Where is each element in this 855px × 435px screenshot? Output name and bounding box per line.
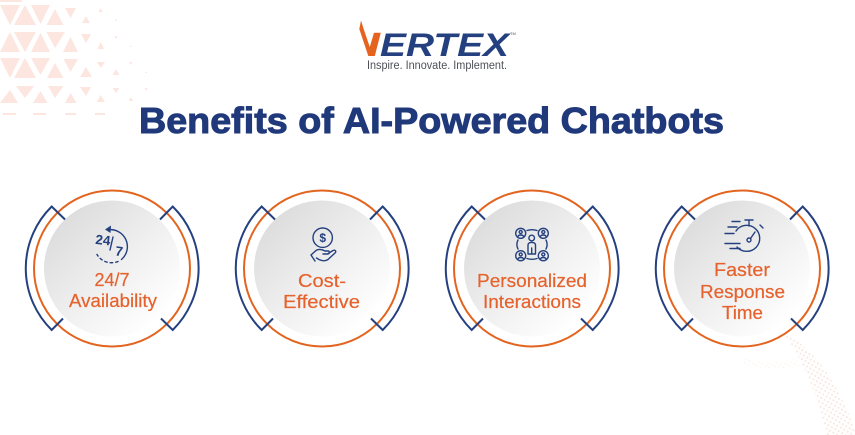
disc — [44, 200, 180, 336]
disc — [674, 200, 810, 336]
title: Benefits of AI-Powered Chatbots — [139, 100, 724, 141]
label: Personalized — [477, 271, 587, 291]
label second line: Effective — [283, 292, 360, 312]
blue brackets — [656, 206, 829, 330]
label: Cost- — [298, 271, 346, 291]
label third line: Time — [722, 303, 763, 323]
panel: faster response time — [656, 190, 829, 346]
orange ring — [454, 190, 610, 346]
icon: 24/7 clock arrow: 24 — [95, 232, 112, 249]
orange ring — [244, 190, 400, 346]
logo: Vertex — [359, 20, 516, 72]
label: Faster — [714, 260, 770, 280]
panel: personalized interactions — [446, 190, 619, 346]
blue brackets — [446, 206, 619, 330]
icon: 24/7 clock arrow — [95, 226, 127, 263]
background triangle pattern, top left — [0, 0, 148, 115]
blue brackets — [26, 206, 199, 330]
label second line: Response — [700, 282, 785, 302]
icon: coin over hand — [311, 228, 336, 261]
logo wordmark: ERTEX — [380, 27, 511, 63]
disc — [464, 200, 600, 336]
icon: stopwatch — [725, 220, 763, 251]
panel: cost-effective — [236, 190, 409, 346]
label second line: Availability — [69, 291, 157, 311]
label second line: Interactions — [483, 292, 581, 312]
orange ring — [34, 190, 190, 346]
blue brackets — [236, 206, 409, 330]
icon: connected people — [516, 228, 548, 261]
disc — [254, 200, 390, 336]
orange ring — [664, 190, 820, 346]
label: 24/7 — [94, 270, 130, 290]
icon: coin over hand: $ — [319, 231, 326, 245]
icon: 24/7 clock arrow: 7 — [114, 243, 124, 259]
panel: 24/7 availability — [26, 190, 199, 346]
logo tagline: Inspire. Innovate. Implement. — [367, 60, 507, 72]
background dotted wave, bottom right — [742, 335, 855, 435]
logo mark: orange V — [359, 20, 381, 56]
trademark mark: TM — [510, 31, 516, 36]
